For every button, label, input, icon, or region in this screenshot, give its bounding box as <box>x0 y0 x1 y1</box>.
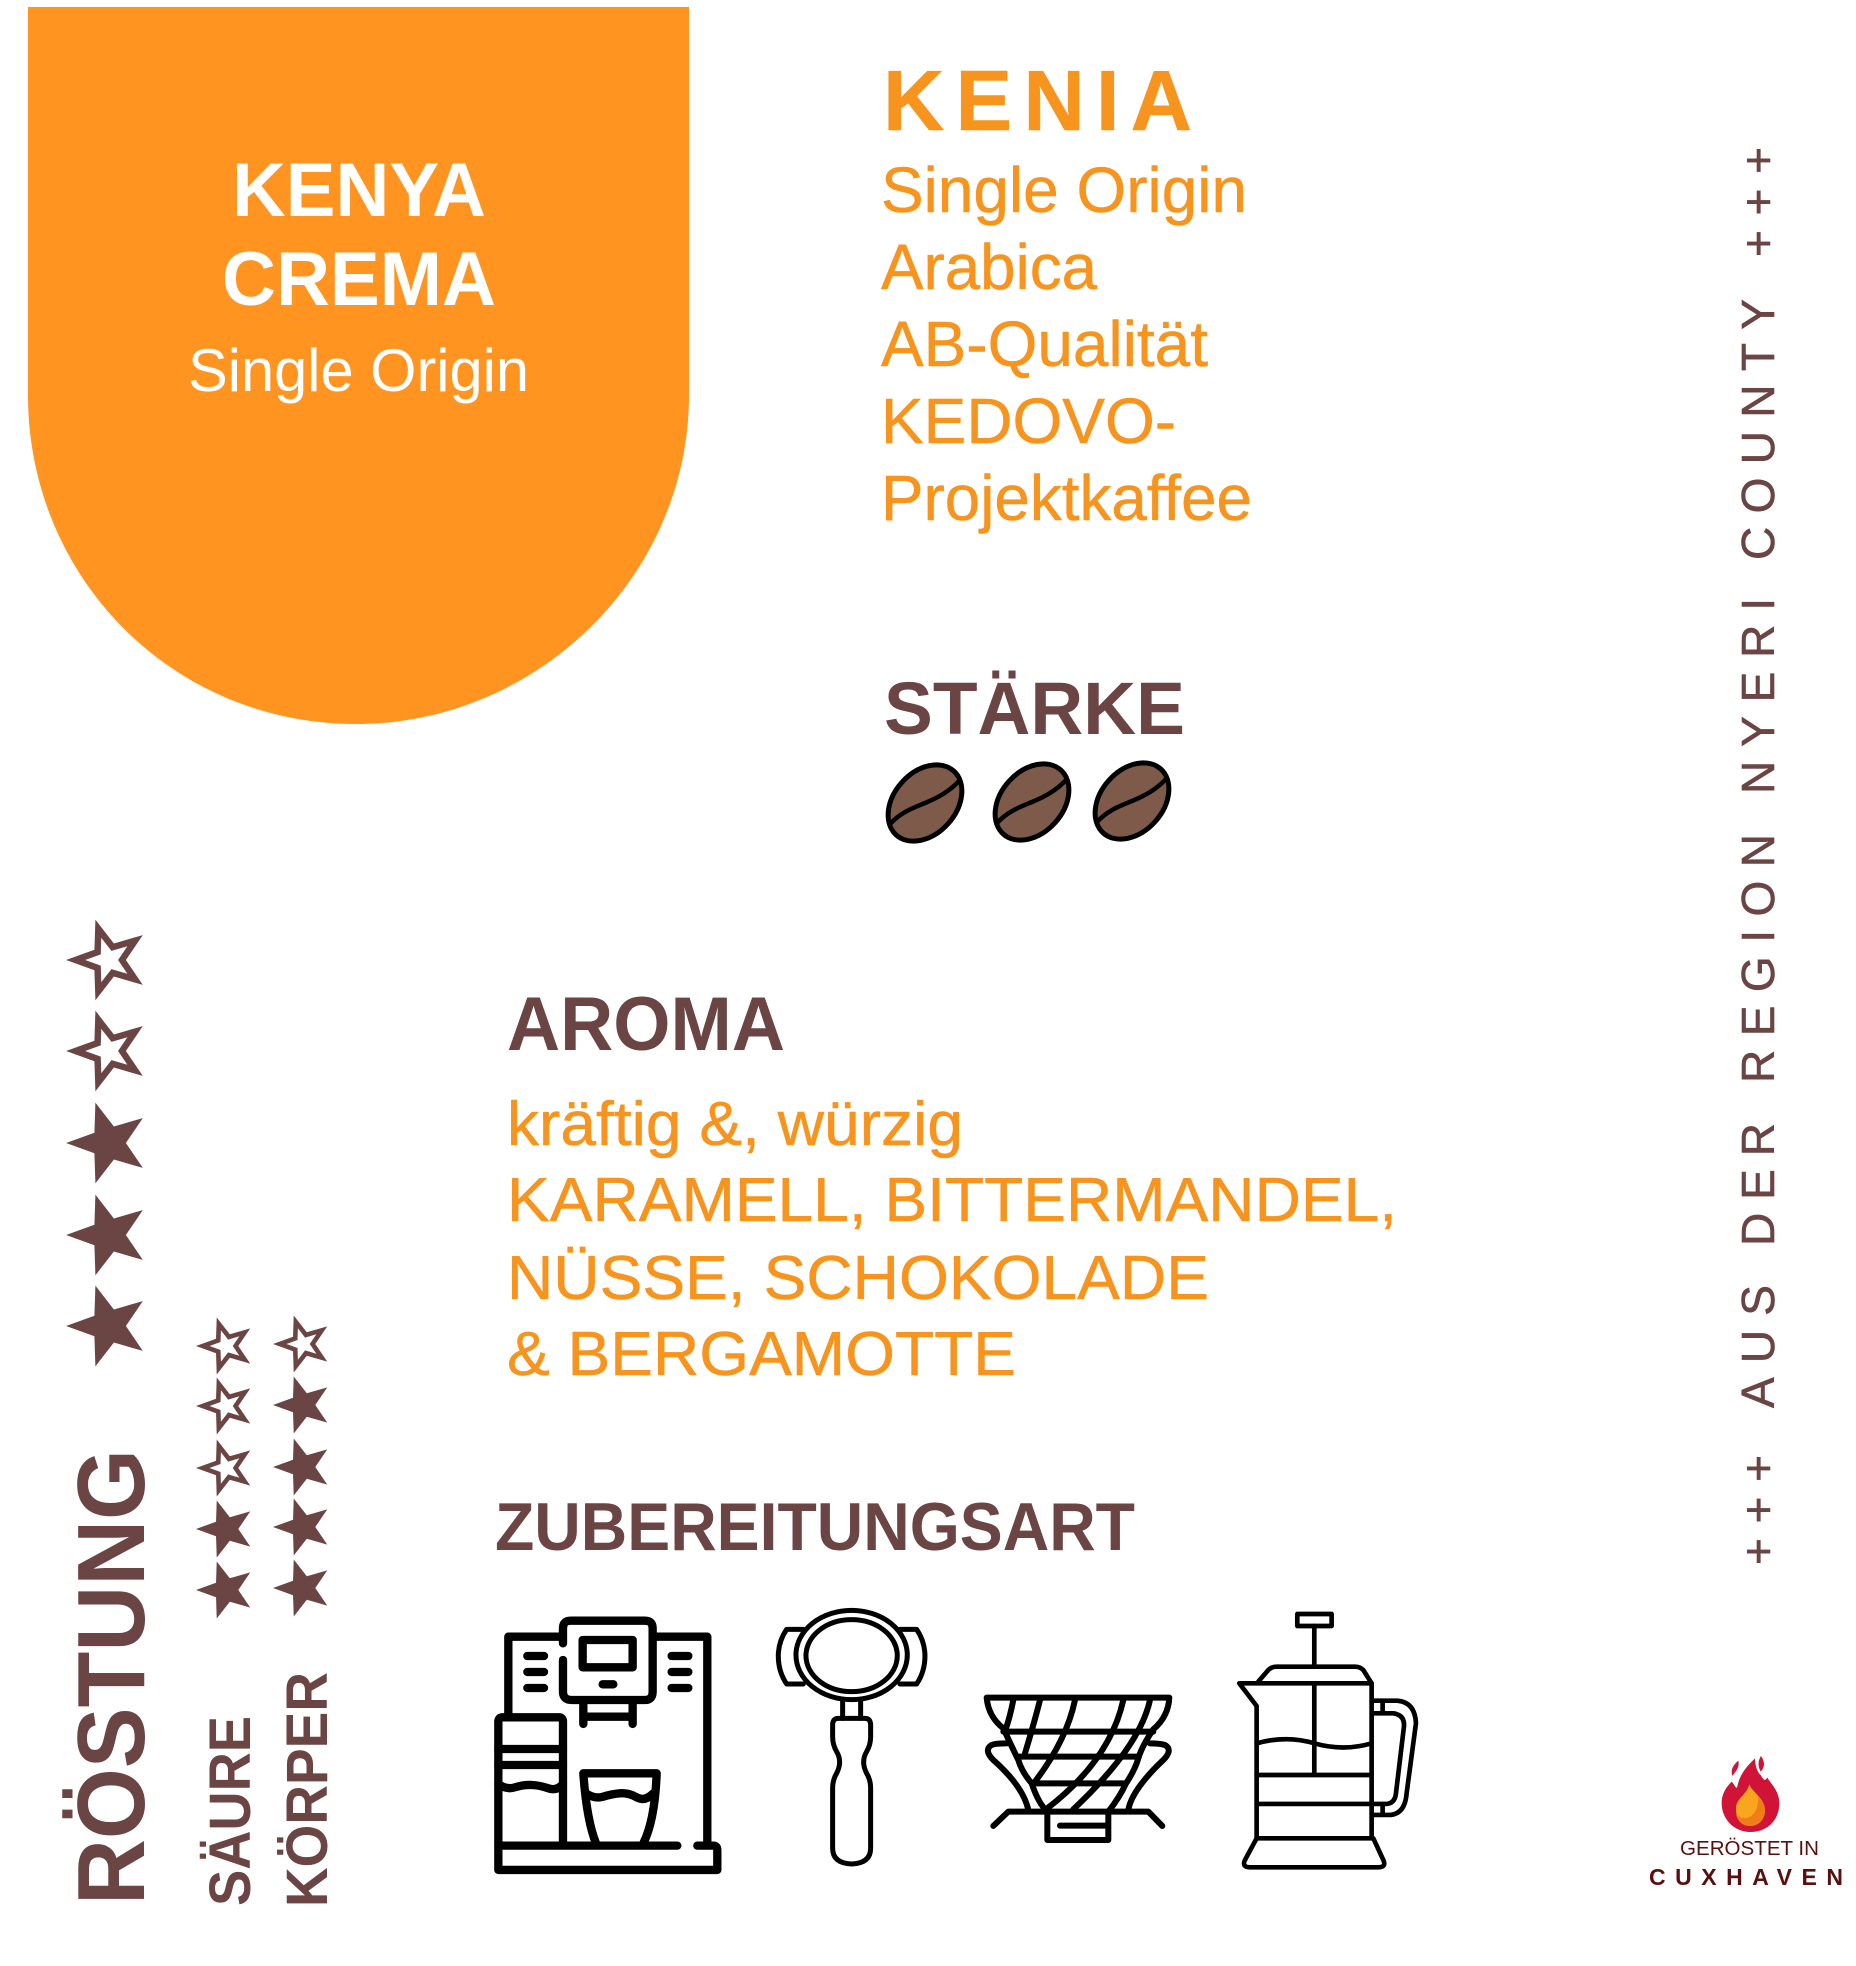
vertical banner text: COUNTY <box>1732 299 1784 560</box>
line: kräftig &, würzig: kräftig &, würzig <box>507 1090 963 1159</box>
icon: portafilter <box>778 1610 925 1864</box>
vertical banner text: +++ <box>1732 147 1784 257</box>
line: NÜSSE, SCHOKOLADE: NÜSSE, SCHOKOLADE <box>507 1244 1209 1313</box>
line: Single Origin: Single Origin <box>881 154 1247 226</box>
subtitle: Single Origin: Single Origin <box>188 337 529 404</box>
vertical banner text: AUS <box>1732 1285 1784 1408</box>
panel: orange product label <box>28 7 689 724</box>
text: CUXHAVEN: CUXHAVEN <box>1649 1864 1843 1890</box>
vertical banner text: REGION <box>1732 834 1784 1083</box>
line: & BERGAMOTTE: & BERGAMOTTE <box>507 1320 1016 1389</box>
line: Projektkaffee: Projektkaffee <box>881 462 1252 534</box>
heading: CREMA: CREMA <box>222 237 496 322</box>
icon: pour-over dripper <box>987 1698 1169 1840</box>
vertical banner text: NYERI <box>1732 598 1784 794</box>
heading: AROMA: AROMA <box>507 982 785 1067</box>
rating: Säure stars <box>196 1317 250 1619</box>
vertical banner text <box>1732 147 1784 1565</box>
icon: french press <box>1239 1614 1416 1867</box>
label: SÄURE: SÄURE <box>198 1716 263 1906</box>
text block: origin details <box>881 54 1252 534</box>
text: GERÖSTET IN: GERÖSTET IN <box>1680 1838 1819 1860</box>
line: KEDOVO-: KEDOVO- <box>881 385 1176 457</box>
rating: Körper stars <box>273 1315 327 1617</box>
label: KÖRPER: KÖRPER <box>275 1672 340 1907</box>
vertical banner text: +++ <box>1732 1455 1784 1565</box>
text block: aroma description <box>507 1090 1397 1389</box>
vertical banner text: DER <box>1732 1123 1784 1246</box>
heading: ZUBEREITUNGSART: ZUBEREITUNGSART <box>495 1489 1135 1565</box>
icon: coffee beans strength rating <box>873 748 1184 856</box>
heading: KENYA: KENYA <box>232 148 486 233</box>
heading: KENIA: KENIA <box>883 54 1192 149</box>
icon: coffee machine <box>498 1621 717 1870</box>
icon: flame <box>1722 1756 1779 1832</box>
heading: STÄRKE: STÄRKE <box>884 667 1185 750</box>
logo: roasted in Cuxhaven <box>1649 1756 1843 1890</box>
line: Arabica: Arabica <box>881 231 1097 303</box>
rating: Röstung stars <box>66 920 143 1366</box>
line: KARAMELL, BITTERMANDEL,: KARAMELL, BITTERMANDEL, <box>507 1166 1397 1235</box>
label: RÖSTUNG: RÖSTUNG <box>58 1449 165 1905</box>
line: AB-Qualität: AB-Qualität <box>881 308 1208 380</box>
